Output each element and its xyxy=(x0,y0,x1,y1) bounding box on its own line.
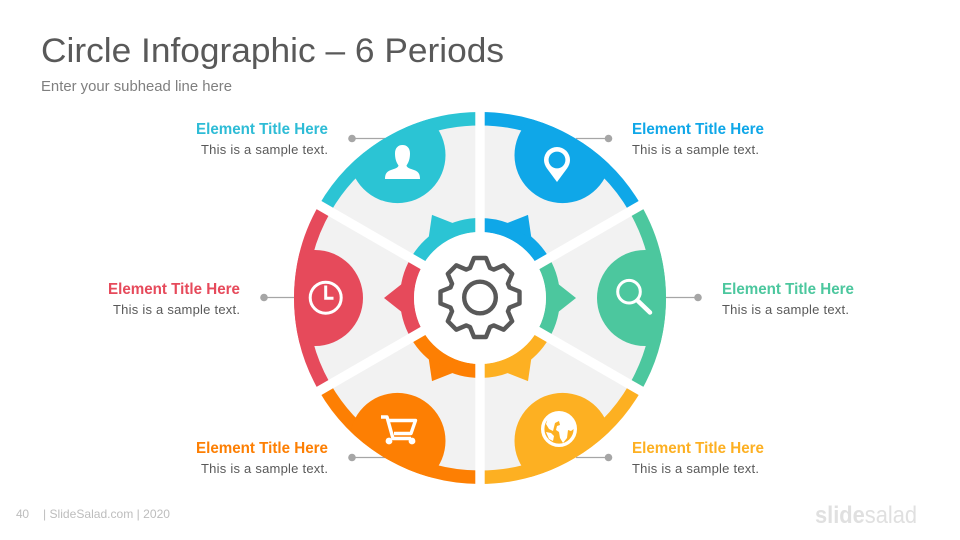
icon: shopping cart xyxy=(381,417,416,444)
icon: globe xyxy=(543,413,575,445)
label: bottom-right xyxy=(632,440,764,476)
footer: 40 xyxy=(16,507,29,521)
logo: slidesalad xyxy=(815,502,917,529)
label: bottom-left xyxy=(196,440,328,476)
label: bottom-right: Element Title Here xyxy=(632,440,764,457)
grey ring background xyxy=(300,118,660,478)
label: right: This is a sample text. xyxy=(722,302,849,317)
label: top-right xyxy=(632,121,764,157)
label: bottom-right: This is a sample text. xyxy=(632,461,759,476)
segment: left red xyxy=(294,209,420,387)
label: left: This is a sample text. xyxy=(113,302,240,317)
footer: | SlideSalad.com | 2020 xyxy=(43,507,170,521)
label: left: Element Title Here xyxy=(108,281,240,298)
circle diagram xyxy=(294,112,666,484)
segment: bottom-left orange xyxy=(325,334,480,489)
label: top-left: This is a sample text. xyxy=(201,142,328,157)
segment: top-right blue xyxy=(480,107,635,262)
icon: map pin xyxy=(544,147,570,182)
label: bottom-left: Element Title Here xyxy=(196,440,328,457)
connector lines xyxy=(260,135,702,461)
label: top-left xyxy=(196,121,328,157)
icon: magnifier xyxy=(618,280,650,312)
segment: right green xyxy=(540,209,666,387)
label: top-right: Element Title Here xyxy=(632,121,764,138)
icon: person xyxy=(385,145,420,179)
icon: central gear xyxy=(440,258,520,337)
label: top-right: This is a sample text. xyxy=(632,142,759,157)
title: Circle Infographic – 6 Periods xyxy=(41,32,504,70)
segment: bottom-right yellow xyxy=(480,334,635,489)
label: right xyxy=(722,281,854,317)
label: left xyxy=(108,281,240,317)
label: bottom-left: This is a sample text. xyxy=(201,461,328,476)
segment: top-left teal xyxy=(325,107,480,262)
subhead: Enter your subhead line here xyxy=(41,79,232,95)
icon: clock xyxy=(310,282,341,313)
label: right: Element Title Here xyxy=(722,281,854,298)
label: top-left: Element Title Here xyxy=(196,121,328,138)
